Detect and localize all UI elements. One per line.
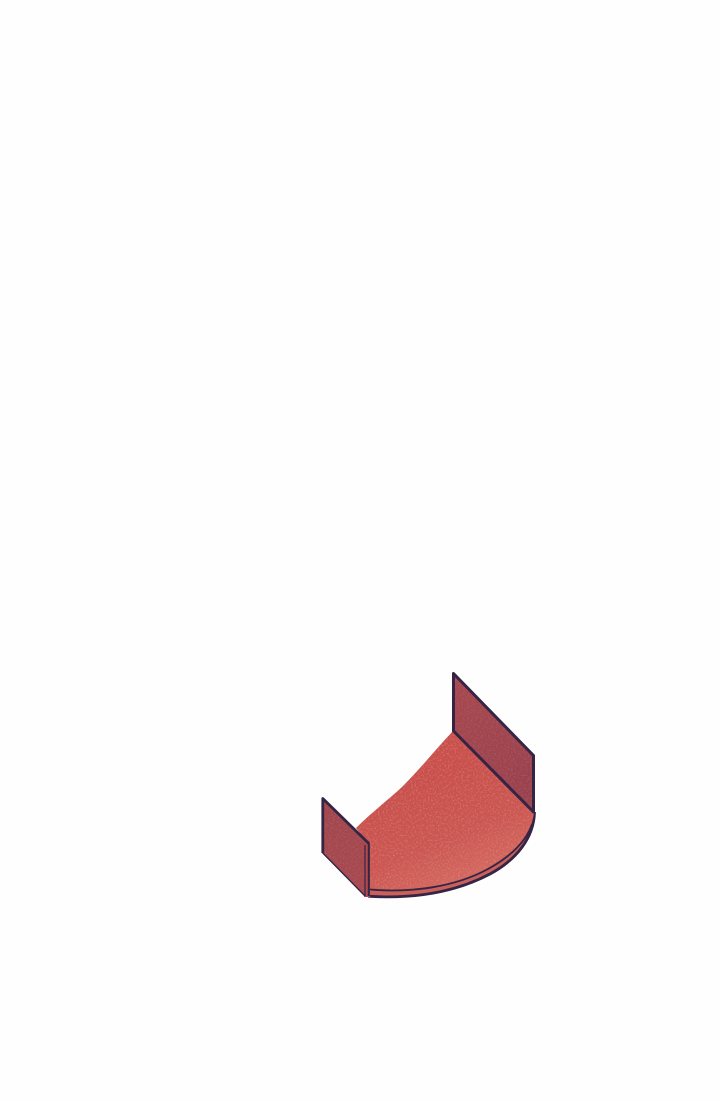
right wall panel xyxy=(453,672,534,812)
curved floor base edge xyxy=(367,812,534,897)
left wall panel xyxy=(322,798,370,897)
curved floor surface xyxy=(356,731,534,889)
floor front edge line xyxy=(370,824,532,890)
